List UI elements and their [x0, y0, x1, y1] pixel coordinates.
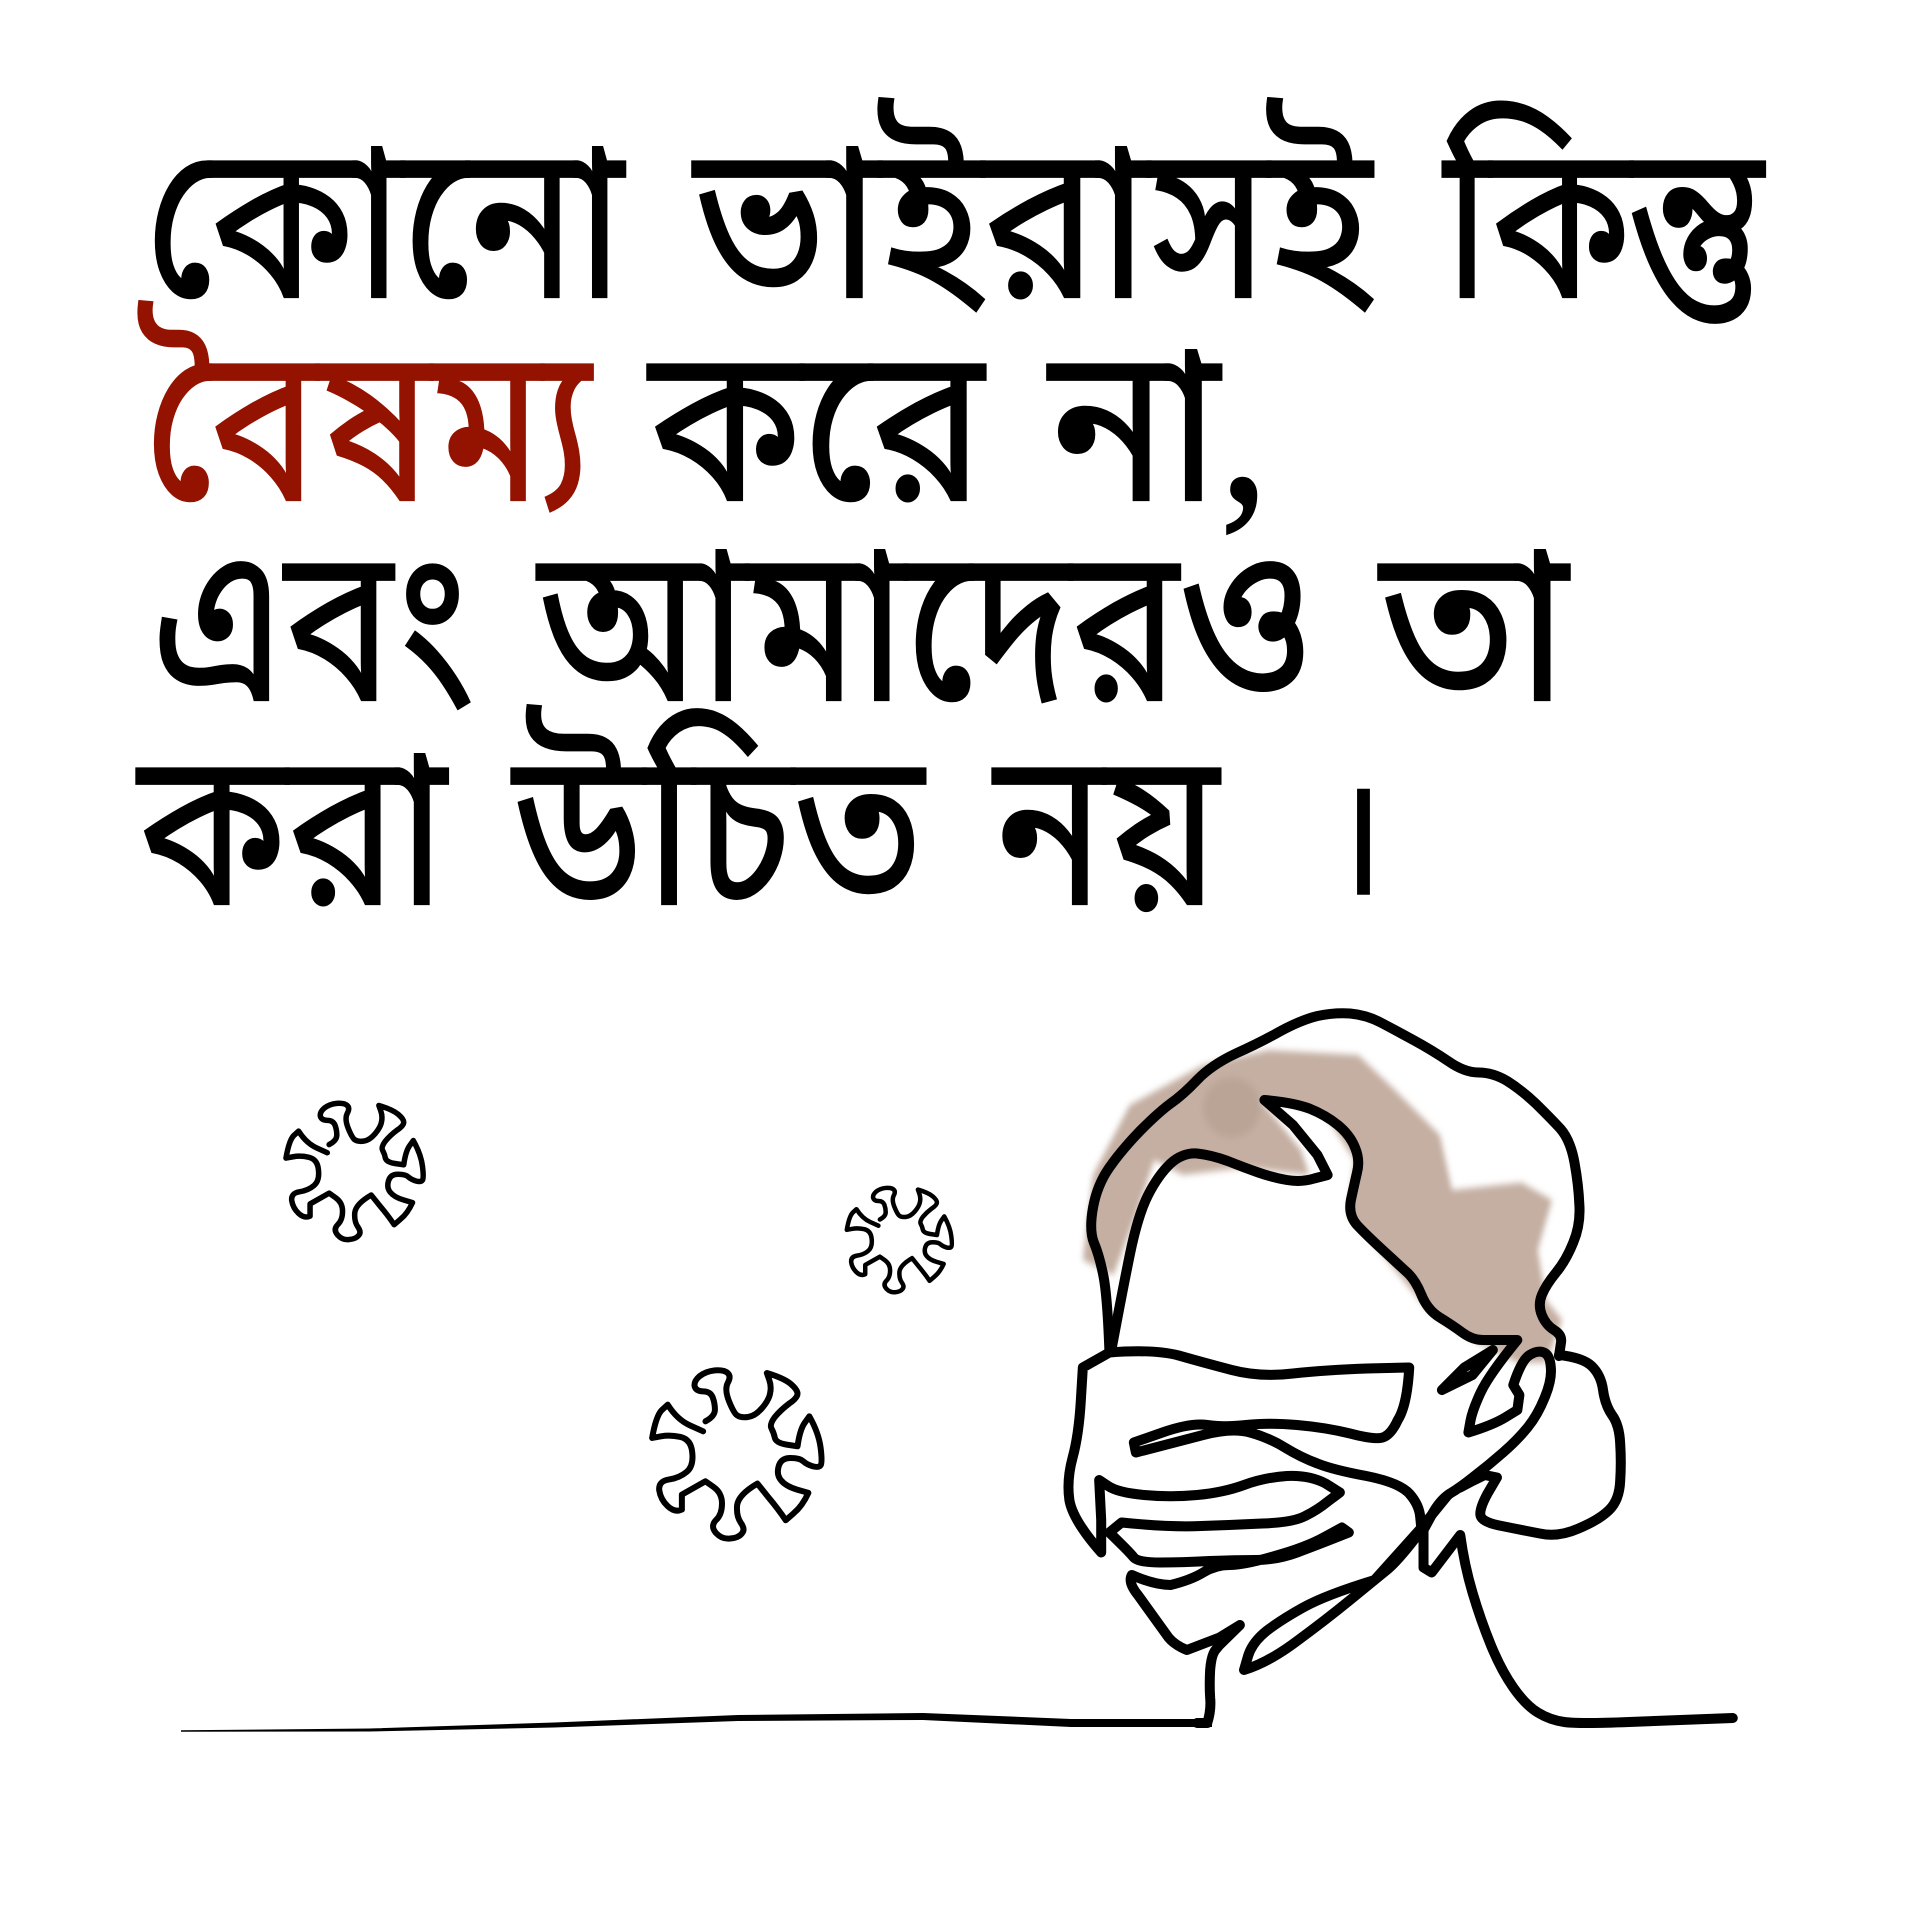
- headline line 2 with red emphasis: [137, 300, 1269, 548]
- headline line 1: [145, 97, 1766, 345]
- headline line 4: নয়: [994, 710, 1219, 952]
- ground line: [181, 1713, 1212, 1732]
- title: headline text: [135, 97, 1766, 952]
- headline line 3: তা: [1380, 506, 1568, 748]
- headline line 4: ।: [1330, 745, 1384, 931]
- icon: large virus, upper left: [286, 1103, 423, 1240]
- headline line 3: এবং: [152, 506, 472, 748]
- icon: large virus, lower centre: [652, 1370, 822, 1539]
- line drawing: ear detail: [1442, 1350, 1493, 1390]
- headline line 2 with red emphasis: করে: [649, 306, 984, 548]
- line drawing: mask and chin: [1068, 1351, 1448, 1723]
- headline line 1: ভাইরাসই: [694, 104, 1372, 345]
- headline line 4: করা: [138, 710, 446, 952]
- headline line 4: [135, 704, 1384, 952]
- headline line 2 with red emphasis: বৈষম্য: [144, 306, 591, 548]
- headline line 1: কোনো: [145, 104, 624, 345]
- line drawing: hair bun: [1460, 1355, 1621, 1535]
- line drawing: inner hair, ear and neck: [1111, 1100, 1733, 1723]
- illustration: person's head with hair wash: [1068, 1013, 1733, 1723]
- headline line 3: [152, 506, 1571, 748]
- headline line 2 with red emphasis: না,: [1049, 306, 1269, 548]
- icon: small virus, upper right: [847, 1188, 952, 1292]
- headline line 4: উচিত: [513, 710, 924, 952]
- line drawing: outer hair: [1091, 1013, 1580, 1356]
- headline line 1: কিন্তু: [1444, 104, 1764, 345]
- hair wash: [1083, 1050, 1562, 1362]
- headline line 3: আমাদেরও: [538, 506, 1312, 748]
